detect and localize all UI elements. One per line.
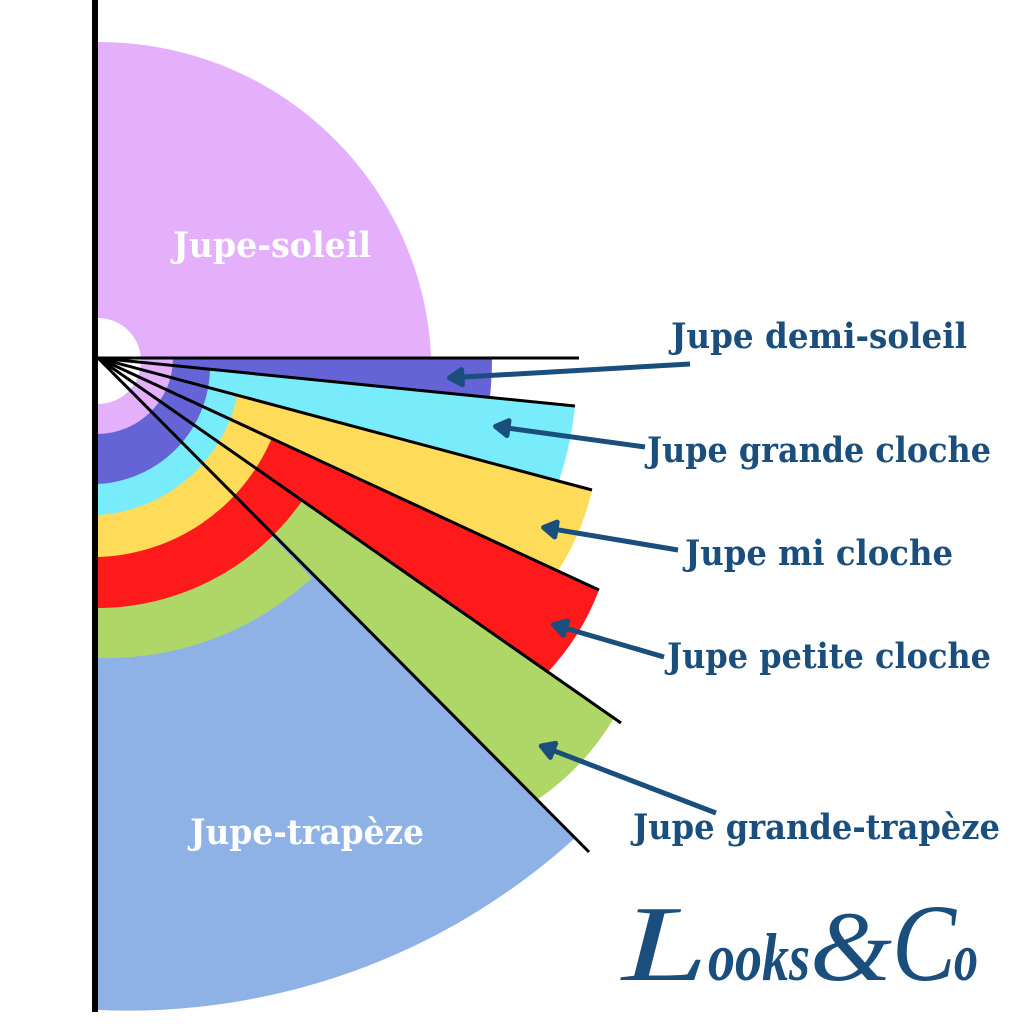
- sector: jupe-soleil: [98, 42, 431, 434]
- sector: jupe demi-soleil: [98, 358, 492, 484]
- waist opening: [55, 318, 141, 404]
- logo: Looks&Co: L: [619, 885, 708, 1004]
- label: jupe grande cloche: Jupe grande cloche: [644, 430, 991, 471]
- arrow: grande-trapèze: [548, 749, 716, 813]
- arrow: petite cloche: [561, 627, 664, 657]
- sector: jupe petite cloche: [98, 358, 599, 672]
- label: jupe mi cloche: Jupe mi cloche: [682, 533, 953, 574]
- logo: Looks&Co: C: [892, 882, 957, 1004]
- logo: Looks&Co: [619, 882, 978, 1004]
- sector: jupe mi cloche: [98, 358, 592, 571]
- sector: jupe grande-trapèze: [98, 358, 614, 800]
- radial lines: [98, 358, 621, 852]
- label: jupe-trapèze: Jupe-trapèze: [187, 812, 424, 853]
- sector: jupe-trapèze: [98, 358, 575, 1011]
- arrow: demi-soleil: [457, 364, 690, 377]
- label: jupe demi-soleil: Jupe demi-soleil: [668, 316, 967, 357]
- vertical axis: [92, 0, 98, 1012]
- logo: Looks&Co: ooks: [708, 919, 810, 995]
- sector: jupe grande cloche: [98, 358, 575, 515]
- arrow: grande cloche: [503, 427, 645, 447]
- label: jupe-soleil: Jupe-soleil: [170, 225, 371, 266]
- logo: Looks&Co: o: [954, 919, 978, 995]
- arrow: mi cloche: [551, 529, 678, 550]
- label: jupe petite cloche: Jupe petite cloche: [664, 636, 991, 677]
- label: jupe grande-trapèze: Jupe grande-trapèze: [630, 807, 1000, 848]
- logo: Looks&Co: &: [810, 891, 892, 1002]
